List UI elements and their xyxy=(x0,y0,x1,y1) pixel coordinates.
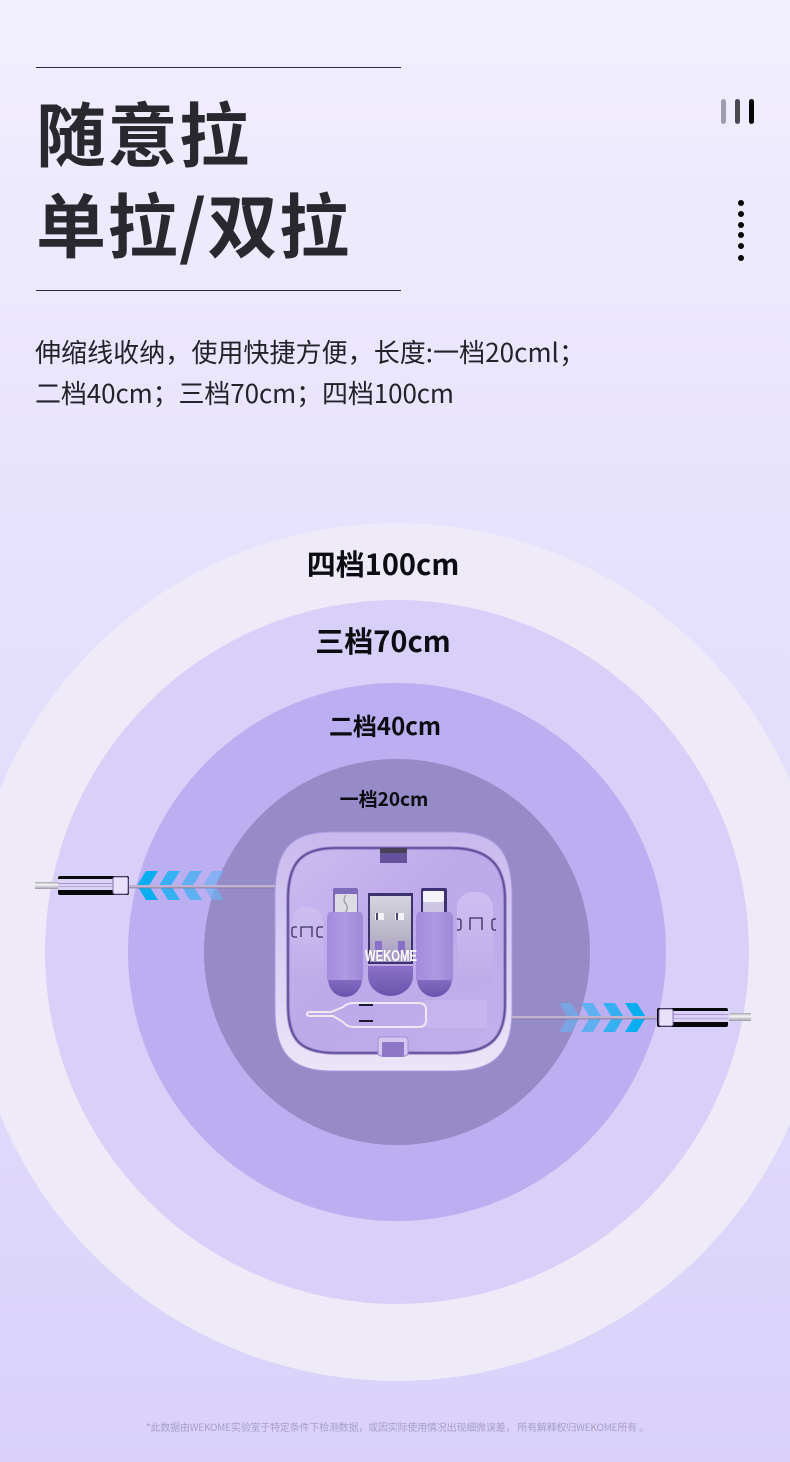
case inner window xyxy=(288,848,505,1053)
label: 100cm: 四档100cm xyxy=(307,542,459,584)
USB-A head xyxy=(368,893,413,964)
right side slot xyxy=(457,892,496,985)
left side slot xyxy=(292,907,323,983)
concentric length circles xyxy=(0,523,790,1381)
title: 单拉/双拉 xyxy=(36,172,349,273)
icon: six vertical dots xyxy=(738,200,744,261)
top clip xyxy=(380,848,407,863)
bottom clip xyxy=(378,1037,408,1057)
description text xyxy=(35,333,585,411)
label: 40cm: 二档40cm xyxy=(329,707,441,742)
header rule top xyxy=(36,67,401,68)
header rule bottom xyxy=(36,290,401,291)
title: 随意拉 xyxy=(36,81,249,182)
lightning head xyxy=(421,888,447,914)
product: retractable cable case xyxy=(275,832,512,1071)
title xyxy=(36,81,349,273)
icon: three vertical bars xyxy=(721,99,754,124)
micro USB connector body xyxy=(327,912,363,997)
description text: 伸缩线收纳，使用快捷方便，长度:一档20cml； xyxy=(35,333,585,370)
WEKOME logo: WEKOME xyxy=(365,948,417,965)
description text: 二档40cm；三档70cm；四档100cm xyxy=(35,374,454,411)
footnote: *此数据由WEKOME实验室于特定条件下检测数据，或因实际使用情况出现细微误差， 所有解释权归WEKOME所有 。 xyxy=(146,1419,649,1434)
SIM eject pin xyxy=(307,1000,487,1028)
micro USB head xyxy=(333,888,358,914)
arrows pointing right xyxy=(559,1003,646,1032)
label: 20cm: 一档20cm xyxy=(340,785,428,812)
left cable xyxy=(35,876,275,895)
arrows pointing left xyxy=(137,871,224,900)
right cable xyxy=(510,1008,751,1027)
label: 70cm: 三档70cm xyxy=(315,619,451,661)
lightning connector body xyxy=(416,912,453,997)
case outer shell xyxy=(275,832,512,1071)
USB-A connector body xyxy=(368,966,413,996)
